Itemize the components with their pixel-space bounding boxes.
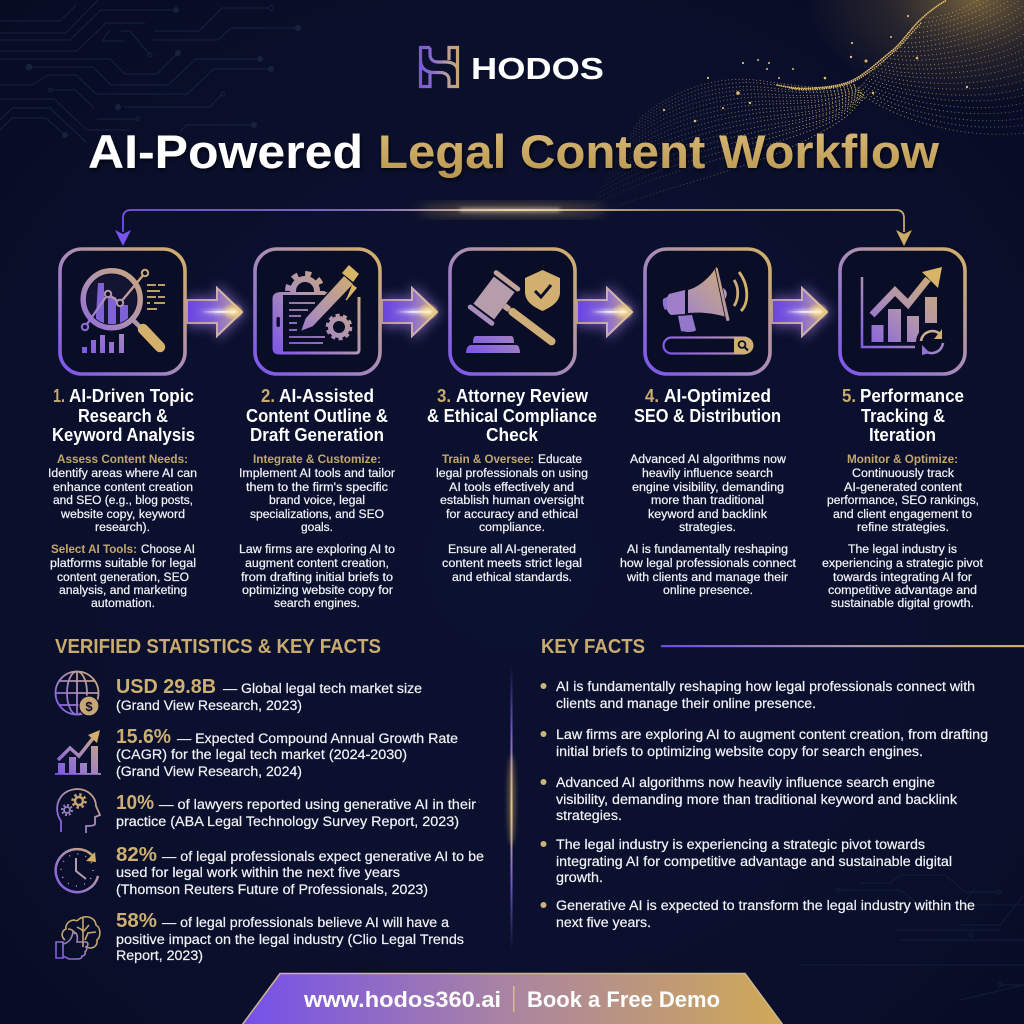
step 2 heading: Content Outline & bbox=[246, 406, 388, 426]
step 3 body: legal professionals on using bbox=[436, 466, 588, 480]
step 3 body: AI tools effectively and bbox=[449, 480, 574, 494]
stat: expectation of AI use bbox=[116, 843, 484, 898]
step 4 body: keyword and backlink bbox=[648, 507, 768, 521]
step 4 body: with clients and manage their bbox=[626, 570, 788, 584]
loop connector arrow bbox=[115, 205, 912, 246]
step 1 body: and SEO (e.g., blog posts, bbox=[53, 493, 193, 507]
step 2 body: augment content creation, bbox=[245, 556, 389, 570]
stat: lawyers using AI: — of lawyers reported using generative AI in their bbox=[159, 797, 476, 813]
call to action banner bbox=[242, 974, 783, 1024]
step 1 body: Choose AI bbox=[141, 542, 195, 556]
step 1 body: Select AI Tools: bbox=[51, 542, 137, 556]
heading: verified statistics: VERIFIED STATISTICS & KEY FACTS bbox=[55, 636, 381, 658]
step 4 body: strategies. bbox=[679, 520, 736, 534]
background circuit pattern top left bbox=[0, 0, 300, 143]
step 4 body: Advanced AI algorithms now bbox=[630, 452, 786, 466]
step 5 body: experiencing a strategic pivot bbox=[822, 556, 984, 570]
stat: positive impact bbox=[116, 909, 464, 964]
stat: expectation of AI use: — of legal professionals expect generative AI to be bbox=[162, 849, 484, 865]
step 2 text bbox=[239, 386, 395, 610]
step 3 heading: Attorney Review bbox=[456, 386, 589, 406]
step 5 body: performance, SEO rankings, bbox=[827, 493, 979, 507]
title: AI-Powered bbox=[88, 125, 363, 178]
step 1 body: research). bbox=[95, 520, 150, 534]
title bbox=[88, 125, 939, 178]
step 5 body: competitive advantage and bbox=[828, 583, 977, 597]
step 3 body: Train & Oversee: bbox=[442, 452, 534, 466]
step 5 body: AI-generated content bbox=[844, 480, 963, 494]
step 3 heading: & Ethical Compliance bbox=[427, 406, 597, 426]
logo mark bbox=[420, 48, 458, 86]
stat: lawyers using AI: 10% bbox=[116, 791, 154, 814]
step 3 body: Educate bbox=[538, 452, 582, 466]
icon: growth chart bbox=[55, 730, 101, 775]
logo wordmark: HODOS bbox=[471, 51, 604, 86]
stat: lawyers using AI bbox=[116, 791, 476, 830]
key fact 1: AI is fundamentally reshaping how legal professionals connect with bbox=[556, 679, 975, 695]
step 5 body: sustainable digital growth. bbox=[831, 596, 974, 610]
step 1 body bbox=[48, 452, 197, 610]
step 4 body: AI is fundamentally reshaping bbox=[627, 542, 788, 556]
step 5 body: refine strategies. bbox=[857, 520, 949, 534]
key fact 2 bbox=[540, 727, 988, 760]
flow arrow 3 bbox=[577, 283, 637, 341]
key fact 3 bbox=[540, 775, 958, 824]
step 5 body: Monitor & Optimize: bbox=[847, 452, 958, 466]
icon: clock bbox=[56, 849, 98, 892]
step 5 icon box: performance chart bbox=[840, 249, 965, 374]
step 4 icon box: megaphone and search bar bbox=[645, 249, 770, 374]
stat: positive impact: positive impact on the legal industry (Clio Legal Trends bbox=[116, 932, 464, 948]
key fact 4: growth. bbox=[556, 870, 603, 886]
step 2 body: Law firms are exploring AI to bbox=[239, 542, 395, 556]
step 3 heading: Check bbox=[486, 425, 539, 445]
stat: CAGR: 15.6% bbox=[116, 725, 171, 748]
step 1 body: analysis, and marketing bbox=[59, 583, 187, 597]
step 4 body: heavily influence search bbox=[642, 466, 773, 480]
heading: key facts: KEY FACTS bbox=[541, 636, 645, 658]
step 3 body: Ensure all AI-generated bbox=[448, 542, 576, 556]
step 1 text bbox=[48, 386, 197, 610]
logo bbox=[420, 48, 604, 86]
step 2 body: from drafting initial briefs to bbox=[241, 570, 393, 584]
step 1 body: enhance content creation bbox=[53, 480, 193, 494]
step 2 body: search engines. bbox=[274, 596, 360, 610]
step 2 body: goals. bbox=[301, 520, 333, 534]
step 2 body: them to the firm's specific bbox=[246, 480, 388, 494]
step 3 heading: 3. bbox=[437, 386, 451, 406]
step 5 body: Continuously track bbox=[852, 466, 955, 480]
step 3 body: content meets strict legal bbox=[442, 556, 582, 570]
step 1 heading: 1. bbox=[53, 386, 65, 406]
step 3 body bbox=[436, 452, 588, 584]
step 4 heading: 4. bbox=[645, 386, 659, 406]
step 2 body bbox=[239, 452, 395, 610]
step 4 text bbox=[620, 386, 797, 597]
stat: positive impact: — of legal professionals believe AI will have a bbox=[162, 915, 449, 931]
step 2 body: brand voice, legal bbox=[269, 493, 365, 507]
step 2 body: optimizing website copy for bbox=[242, 583, 393, 597]
step 4 body: more than traditional bbox=[651, 493, 764, 507]
step 5 heading: Iteration bbox=[869, 425, 936, 445]
key fact 4: The legal industry is experiencing a strategic pivot towards bbox=[556, 837, 925, 853]
step 5 heading: Tracking & bbox=[861, 406, 945, 426]
step 3 body: for accuracy and ethical bbox=[446, 507, 578, 521]
step 4 body: online presence. bbox=[663, 583, 753, 597]
stat: CAGR: (Grand View Research, 2024) bbox=[116, 764, 302, 780]
stat: expectation of AI use: used for legal work within the next five years bbox=[116, 865, 400, 881]
stat: market size: USD 29.8B bbox=[116, 675, 216, 698]
step 5 heading bbox=[842, 386, 964, 445]
step 2 heading: AI-Assisted bbox=[279, 386, 374, 406]
step 2 heading: 2. bbox=[261, 386, 275, 406]
call to action banner: Book a Free Demo bbox=[527, 987, 720, 1012]
step 5 heading: 5. bbox=[842, 386, 856, 406]
stat: market size: (Grand View Research, 2023) bbox=[116, 698, 302, 714]
step 3 text bbox=[427, 386, 597, 584]
stat: lawyers using AI: practice (ABA Legal Technology Survey Report, 2023) bbox=[116, 814, 459, 830]
step 3 body: establish human oversight bbox=[440, 493, 585, 507]
step 4 body bbox=[620, 452, 797, 597]
step 1 heading bbox=[52, 386, 195, 445]
step 1 heading: AI-Driven Topic bbox=[69, 386, 194, 406]
step 4 body: engine visibility, demanding bbox=[632, 480, 784, 494]
call to action banner: www.hodos360.ai bbox=[303, 987, 501, 1012]
step 1 body: Identify areas where AI can bbox=[48, 466, 197, 480]
flow arrow 1 bbox=[187, 283, 247, 341]
step 3 heading bbox=[427, 386, 597, 445]
key fact 1: clients and manage their online presence. bbox=[556, 696, 816, 712]
step 5 body bbox=[822, 452, 984, 610]
step 3 body: compliance. bbox=[479, 520, 545, 534]
step 1 icon box: research magnifier bbox=[60, 249, 185, 374]
stat: market size: — Global legal tech market size bbox=[223, 681, 422, 697]
step 2 body: Implement AI tools and tailor bbox=[239, 466, 395, 480]
step 1 body: platforms suitable for legal bbox=[50, 556, 196, 570]
stat: CAGR bbox=[116, 725, 458, 780]
step 1 heading: Keyword Analysis bbox=[52, 425, 195, 445]
key fact 3: Advanced AI algorithms now heavily influence search engine bbox=[556, 775, 935, 791]
key fact 2: Law firms are exploring AI to augment content creation, from drafting bbox=[556, 727, 988, 743]
step 3 icon box: gavel and shield bbox=[450, 249, 575, 374]
stat: market size bbox=[116, 675, 422, 714]
title: Legal Content Workflow bbox=[378, 125, 939, 178]
icon: globe with dollar bbox=[56, 672, 99, 716]
key fact 3: visibility, demanding more than traditional keyword and backlink bbox=[556, 792, 958, 808]
step 4 heading bbox=[634, 386, 781, 426]
step 2 body: Integrate & Customize: bbox=[253, 452, 381, 466]
step 5 heading: Performance bbox=[860, 386, 964, 406]
stat: CAGR: — Expected Compound Annual Growth Rate bbox=[177, 731, 458, 747]
flow arrow 4 bbox=[772, 283, 832, 341]
step 5 body: The legal industry is bbox=[848, 542, 957, 556]
key fact 1 bbox=[540, 679, 975, 712]
key fact 3: strategies. bbox=[556, 808, 622, 824]
icon: head with gears bbox=[57, 789, 100, 833]
step 4 body: how legal professionals connect bbox=[620, 556, 797, 570]
step 2 heading: Draft Generation bbox=[250, 425, 384, 445]
particle wave decoration bbox=[588, 0, 1024, 218]
background circuit pattern bottom right bbox=[800, 875, 1024, 1000]
step 2 body: specializations, and SEO bbox=[250, 507, 384, 521]
step 2 icon box: content outline tablet bbox=[255, 249, 380, 374]
step 5 text bbox=[822, 386, 984, 610]
stat: CAGR: (CAGR) for the legal tech market (2024-2030) bbox=[116, 747, 407, 763]
key fact 5: next five years. bbox=[556, 915, 651, 931]
step 2 heading bbox=[246, 386, 388, 445]
step 5 body: and client engagement to bbox=[833, 507, 972, 521]
step 1 heading: Research & bbox=[78, 406, 168, 426]
key fact 4 bbox=[540, 837, 952, 886]
key fact 5 bbox=[540, 898, 975, 931]
stat: positive impact: 58% bbox=[116, 909, 157, 932]
step 1 body: content generation, SEO bbox=[57, 570, 189, 584]
step 1 body: Assess Content Needs: bbox=[57, 452, 188, 466]
step 4 heading: AI-Optimized bbox=[664, 386, 771, 406]
key fact 2: initial briefs to optimizing website copy for search engines. bbox=[556, 744, 923, 760]
stat: expectation of AI use: (Thomson Reuters Future of Professionals, 2023) bbox=[116, 882, 428, 898]
key fact 5: Generative AI is expected to transform the legal industry within the bbox=[556, 898, 975, 914]
stat: positive impact: Report, 2023) bbox=[116, 948, 203, 964]
step 3 body: and ethical standards. bbox=[452, 570, 572, 584]
step 4 heading: SEO & Distribution bbox=[634, 406, 781, 426]
step 5 body: towards integrating AI for bbox=[833, 570, 972, 584]
icon: globe with dollar: $ bbox=[85, 699, 93, 714]
step 1 body: automation. bbox=[91, 596, 155, 610]
flow arrow 2 bbox=[382, 283, 442, 341]
step 1 body: website copy, keyword bbox=[60, 507, 185, 521]
icon: thumbs up with brain bbox=[56, 917, 100, 959]
column divider bbox=[508, 665, 516, 950]
key fact 4: integrating AI for competitive advantage and sustainable digital bbox=[556, 854, 952, 870]
stat: expectation of AI use: 82% bbox=[116, 843, 157, 866]
